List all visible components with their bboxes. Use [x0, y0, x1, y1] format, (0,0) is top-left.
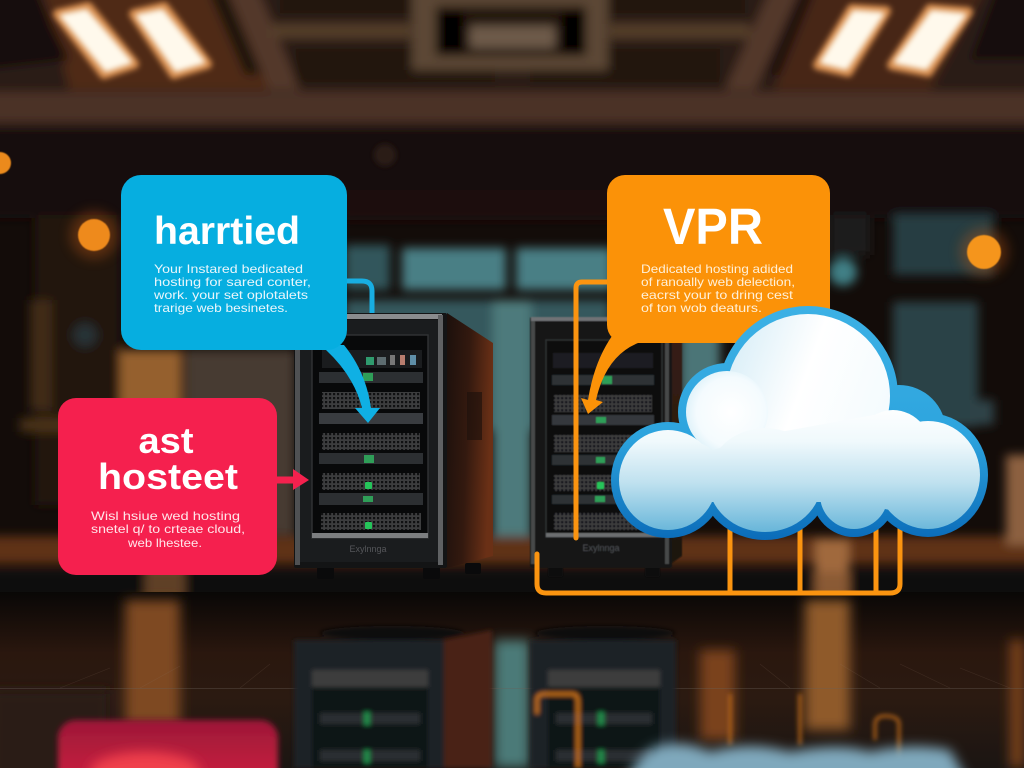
heading: ast: [138, 420, 194, 461]
description: Your Instared bedicated: [154, 262, 303, 276]
icon: cloud: [611, 306, 988, 540]
side panel: [447, 313, 493, 568]
feet: [317, 567, 334, 579]
arrow: red panel to server: [275, 469, 309, 490]
case: [294, 313, 447, 568]
reflection of servers: [294, 626, 899, 768]
description: eacrst your to dring cest: [641, 288, 794, 302]
description: trarige web besinetes.: [154, 301, 288, 315]
description: of ton wob deaturs.: [641, 301, 762, 315]
arrow: orange panel into server: [581, 336, 638, 414]
description: of ranoally web delection,: [641, 275, 795, 289]
dedicated server right: Exylnnga: [582, 543, 620, 553]
description: [91, 509, 245, 550]
orange lamps: [0, 144, 1008, 276]
arrow: blue panel into server: [318, 345, 380, 423]
heading: VPR: [663, 198, 763, 255]
panel: host (red): [58, 398, 277, 575]
windows: [345, 245, 390, 290]
reflection of cloud: [622, 744, 972, 768]
connector: blue panel to left server: [345, 281, 372, 313]
panel: VPS (orange): [607, 175, 830, 343]
description: web lhestee.: [127, 536, 202, 550]
dedicated server right: [530, 317, 682, 577]
description: hosting for sared conter,: [154, 275, 311, 289]
connector: orange panel down to right server: [576, 282, 609, 538]
rack units: [319, 372, 423, 383]
reflective floor: [0, 592, 1024, 768]
network lines under cloud: [537, 525, 900, 593]
description: [641, 262, 795, 315]
left wall panes: [35, 215, 120, 505]
ceiling lights: [58, 7, 968, 74]
description: Dedicated hosting adided: [641, 262, 793, 276]
panel: shared hosting (blue): [121, 175, 347, 350]
dedicated server left: [294, 313, 493, 579]
reflection of red panel: [58, 720, 278, 768]
table: [0, 536, 1024, 564]
dark band: [0, 128, 1024, 218]
heading: [98, 420, 238, 497]
heading: harrtied: [154, 210, 300, 253]
description: work. your set oplotalets: [153, 288, 308, 302]
case label: Exylnnga: [349, 544, 387, 554]
ceiling: [0, 0, 1024, 130]
description: Wisl hsiue wed hosting: [91, 509, 240, 523]
cloud outline: [611, 306, 988, 540]
heading: hosteet: [98, 456, 238, 497]
description: snetel q/ to crteae cloud,: [91, 522, 245, 536]
cloud body: [726, 314, 890, 478]
status display: [322, 350, 422, 368]
description: [153, 262, 311, 315]
floor sheen lines: [60, 664, 1010, 688]
